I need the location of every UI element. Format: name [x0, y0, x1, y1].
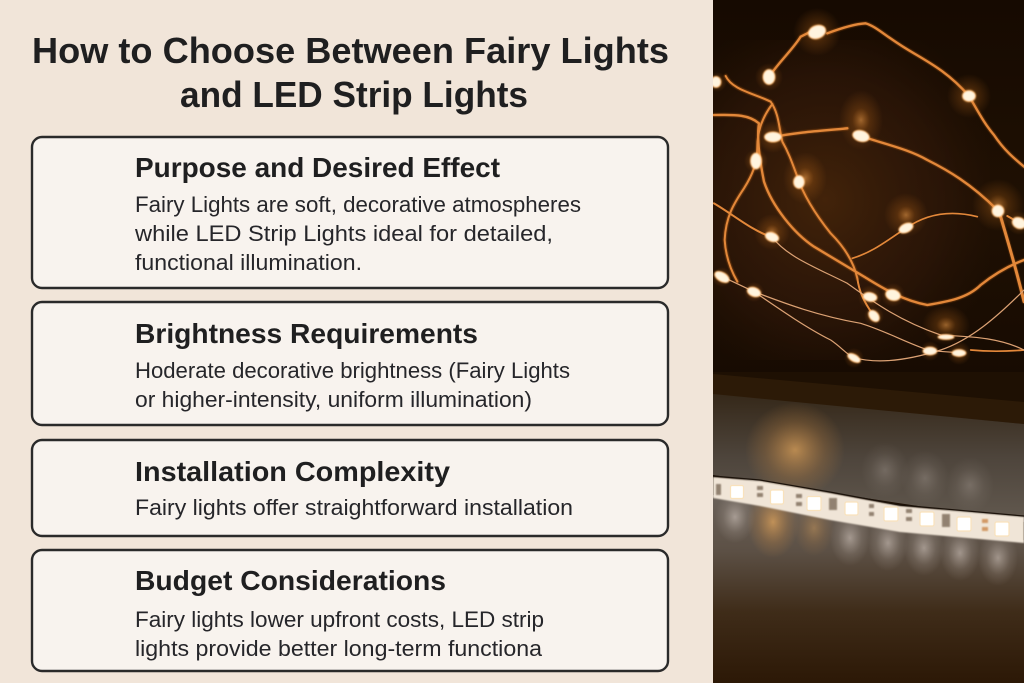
title	[32, 30, 669, 115]
left background panel	[0, 0, 713, 683]
text: budget description: lights provide better long-term functiona	[135, 636, 542, 661]
strip contacts	[716, 484, 988, 531]
heading: brightness: Brightness Requirements	[135, 318, 478, 349]
title: and LED Strip Lights	[180, 74, 528, 115]
heading: budget: Budget Considerations	[135, 565, 446, 596]
ledge	[713, 372, 1024, 424]
LED strip	[713, 476, 1024, 543]
panel: installation complexity	[32, 440, 668, 536]
text: brightness description: Hoderate decorative brightness (Fairy Lights	[135, 358, 570, 383]
panel: purpose and desired effect	[32, 137, 668, 288]
title: How to Choose Between Fairy Lights	[32, 30, 669, 71]
text: purpose description: Fairy Lights are soft, decorative atmospheres	[135, 192, 581, 217]
fairy light bulbs	[711, 23, 1024, 365]
warm glow on wall	[750, 406, 840, 488]
text: purpose description: functional illumination.	[135, 250, 362, 275]
text: purpose description	[134, 192, 581, 275]
text: brightness description: or higher-intensity, uniform illumination)	[135, 387, 532, 412]
text: purpose description: while LED Strip Lights ideal for detailed,	[134, 221, 553, 246]
heading: purpose: Purpose and Desired Effect	[135, 152, 500, 183]
light reflections	[719, 501, 1014, 582]
text: budget description: Fairy lights lower upfront costs, LED strip	[135, 607, 544, 632]
LED chips	[730, 486, 1009, 536]
thin silvery wires	[722, 237, 1024, 361]
wall below strip	[713, 495, 1024, 683]
fairy light glows	[707, 8, 1024, 368]
fairy light wires	[714, 23, 1024, 351]
text: brightness description	[135, 358, 570, 412]
panel: brightness requirements	[32, 302, 668, 425]
text: installation description: Fairy lights offer straightforward installation	[135, 495, 573, 520]
wall band above strip	[713, 394, 1024, 522]
panel: budget considerations	[32, 550, 668, 671]
heading: installation: Installation Complexity	[135, 456, 451, 487]
text: budget description	[135, 607, 544, 661]
photo panel: fairy lights and LED strip	[690, 0, 1024, 683]
fairy lights background	[713, 0, 1024, 375]
fairy light wire halo	[714, 23, 1024, 305]
